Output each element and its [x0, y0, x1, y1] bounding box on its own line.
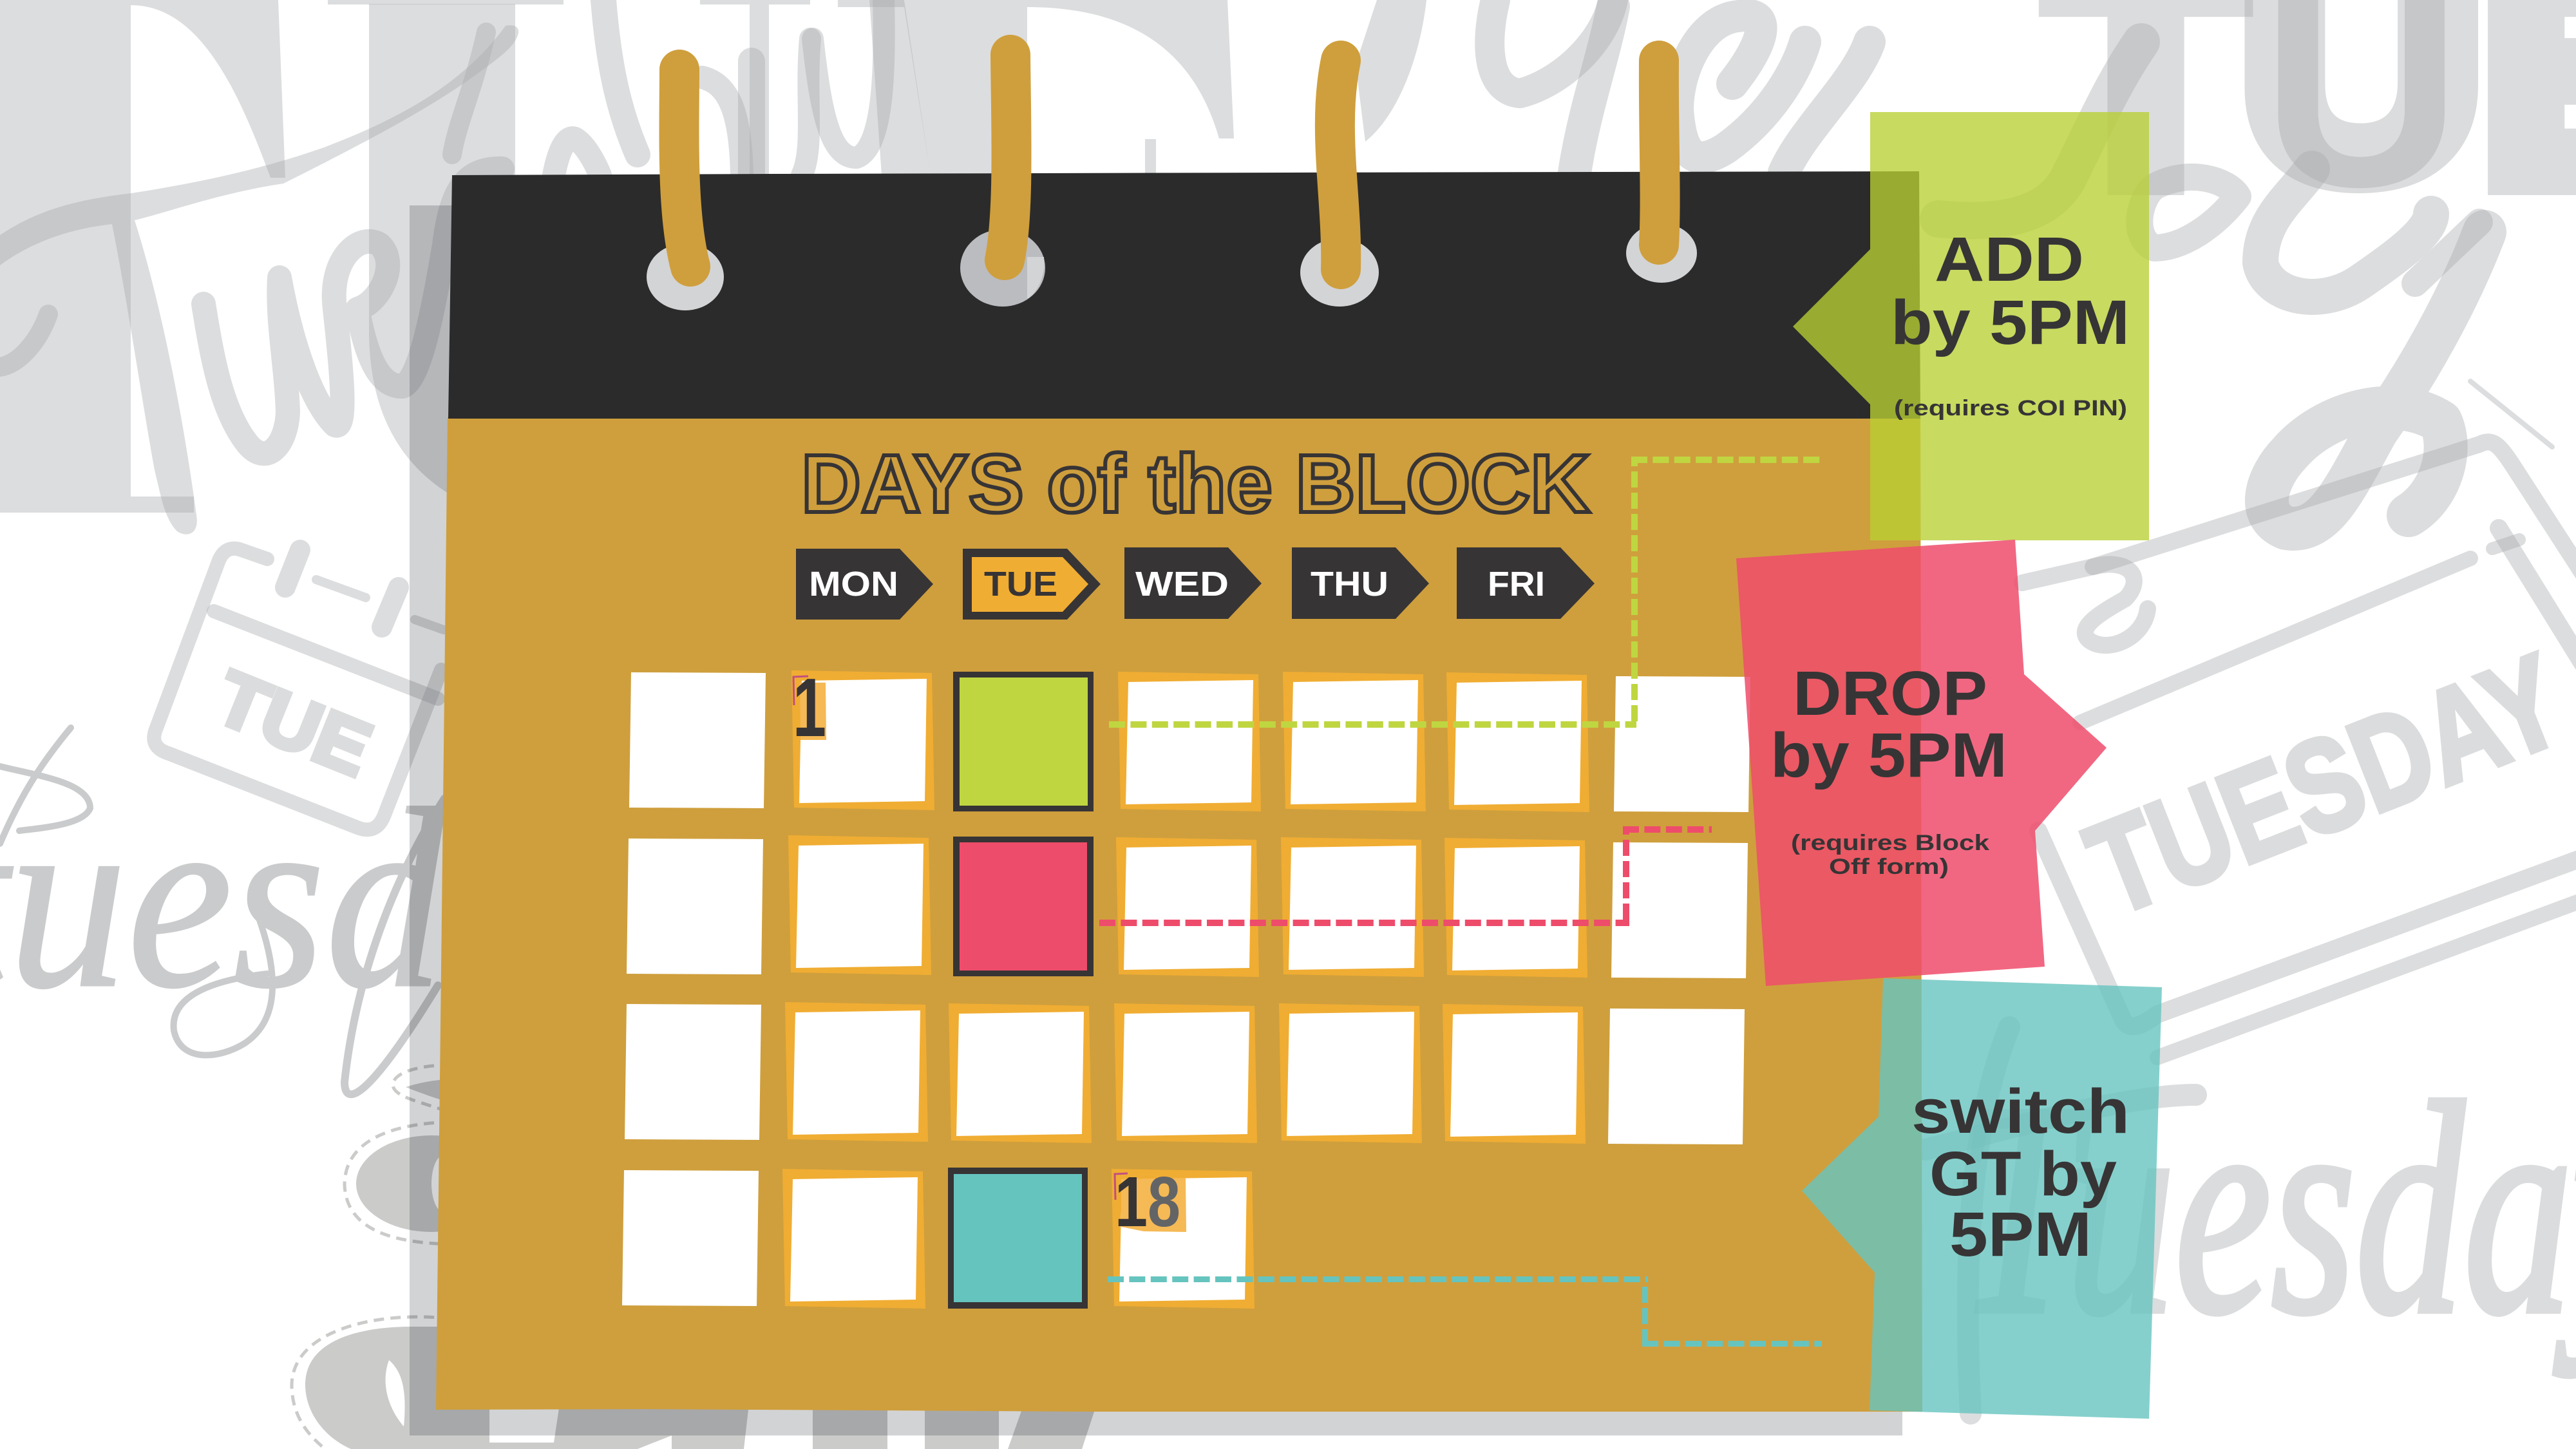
date label: 1: 1	[793, 661, 826, 754]
calendar header band	[448, 171, 1920, 419]
calendar drop shadow panel	[410, 205, 1902, 1435]
background: flourish strokes, top left script	[0, 25, 518, 535]
calendar grid	[622, 661, 1750, 1309]
callout: ADD by 5PM: by 5PM	[1891, 287, 2130, 357]
connector: red dashed line	[1099, 829, 1712, 923]
panel: calendar	[436, 55, 1922, 1412]
icon: binding holes	[647, 223, 1697, 310]
tag: MON: MON	[809, 565, 898, 603]
callout: DROP by 5PM: by 5PM	[1770, 720, 2007, 790]
background: tilted TUE calendar tag, left: TUE	[204, 655, 383, 793]
teal GT deadline cell	[948, 1168, 1088, 1309]
background: script fragments between calendar rings	[452, 0, 1870, 175]
background: script flourish, top right	[1938, 42, 2552, 529]
plain white cells, weekend columns	[622, 672, 1750, 1306]
tag: WED: WED	[1135, 565, 1229, 603]
background: tilted TUESDAY calendar tag, right	[2022, 442, 2576, 1057]
background: tilted TUE calendar tag, left	[154, 549, 444, 829]
tag: THU: THU	[1311, 565, 1388, 603]
tag: TUE highlighted	[963, 549, 1101, 620]
callout: DROP by 5PM	[1736, 540, 2107, 986]
callout: ADD by 5PM	[1793, 112, 2149, 540]
calendar body	[436, 417, 1922, 1412]
tag: WED	[1124, 547, 1262, 619]
tag: FRI	[1457, 547, 1595, 619]
callout: DROP by 5PM: DROP	[1793, 658, 1987, 728]
tag: MON	[796, 549, 933, 620]
tag: FRI: FRI	[1488, 565, 1545, 603]
background: big word TUE, top right	[2051, 0, 2576, 245]
callout: switch GT by 5PM	[1802, 978, 2162, 1419]
callout: ADD by 5PM: (requires COI PIN)	[1894, 396, 2127, 421]
weekday tags	[796, 547, 1595, 620]
callout: switch GT by 5PM: 5PM	[1949, 1199, 2092, 1269]
callout: DROP by 5PM: (requires Block	[1791, 831, 1989, 855]
icon: binding rings	[679, 55, 1660, 269]
callout: switch GT by 5PM: switch	[1911, 1076, 2130, 1146]
background: bubble letters with dashed outlines, bottom left	[292, 1065, 1097, 1449]
date label: 18: 18	[1115, 1162, 1180, 1242]
tag: THU	[1292, 547, 1429, 619]
orange-framed day cells	[782, 670, 1589, 1309]
callout: switch GT by 5PM: GT by	[1929, 1139, 2117, 1209]
connector: green dashed line	[1109, 460, 1821, 724]
background: large block letter fragments, top left	[0, 0, 1234, 513]
callout: ADD by 5PM: ADD	[1935, 224, 2084, 294]
red DROP deadline cell	[953, 837, 1094, 976]
tag: TUE highlighted: TUE	[984, 565, 1057, 603]
callout: DROP by 5PM: Off form)	[1829, 855, 1949, 879]
title: DAYS of the BLOCK	[801, 438, 1590, 530]
green ADD deadline cell	[953, 672, 1094, 811]
connector: teal dashed line	[1108, 1279, 1822, 1347]
